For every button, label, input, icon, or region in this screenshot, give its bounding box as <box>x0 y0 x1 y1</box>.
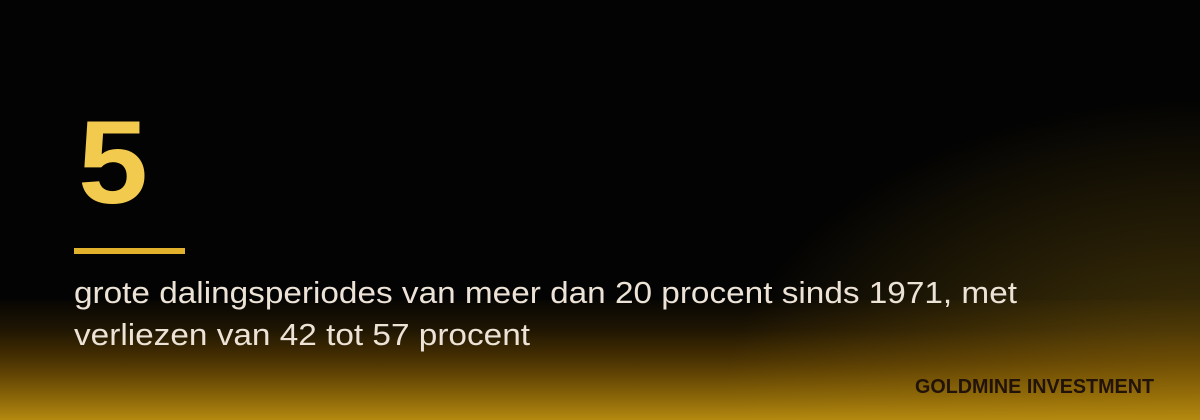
description text <box>74 275 1017 352</box>
brand label: GOLDMINE INVESTMENT <box>915 376 1154 398</box>
description text: verliezen van 42 tot 57 procent <box>74 317 530 352</box>
description text: grote dalingsperiodes van meer dan 20 procent sinds 1971, met <box>74 275 1017 310</box>
big number 5: 5 <box>78 97 148 229</box>
accent rule <box>74 248 185 254</box>
